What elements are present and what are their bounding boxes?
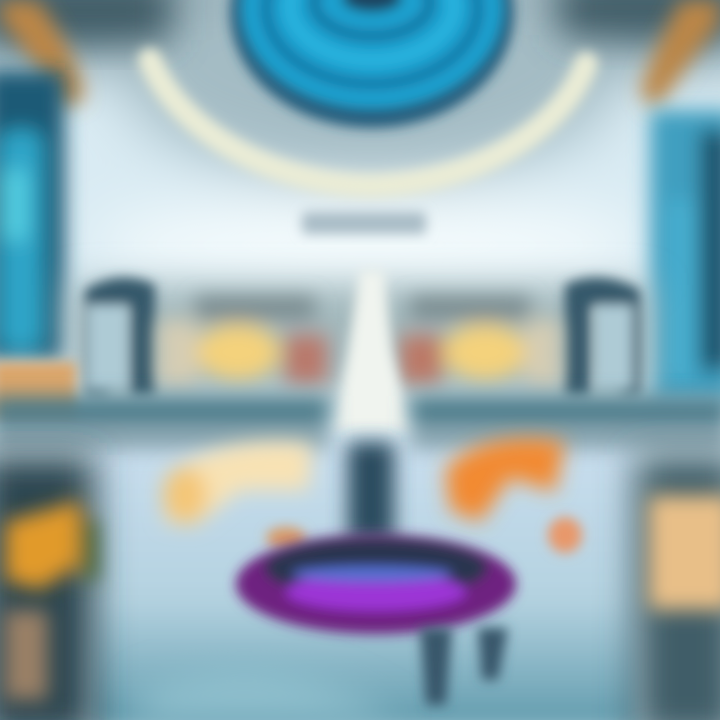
floor highlight xyxy=(140,666,400,720)
right shop: tan display xyxy=(648,495,720,610)
small orange blob xyxy=(548,517,582,553)
spiral: blue ceiling rings xyxy=(230,0,514,128)
cream map shape xyxy=(163,442,312,525)
ceiling: dome shading xyxy=(0,0,720,290)
gallery: middle storey xyxy=(70,270,650,432)
top left streak: orange xyxy=(0,0,84,108)
ceiling label: blurred sign xyxy=(302,212,426,234)
top right streak: orange xyxy=(640,0,720,110)
left shop: beige display xyxy=(4,610,48,700)
top corners: dark shadow xyxy=(0,0,720,40)
central spire: white xyxy=(334,270,410,432)
purple ring xyxy=(236,534,516,634)
small orange blob left xyxy=(266,527,306,549)
central pedestal: dark xyxy=(348,442,394,542)
left wall: dark lower section xyxy=(0,455,95,720)
orange map shape xyxy=(445,438,565,522)
left column: blue xyxy=(0,70,65,360)
left arch: dark xyxy=(85,278,155,395)
balcony: dark band xyxy=(0,396,720,448)
right column: blue xyxy=(650,110,720,400)
central legs: dark xyxy=(420,628,508,705)
right wall: dark lower section xyxy=(635,455,720,720)
left counter: orange xyxy=(0,362,76,418)
right shop: yellow panels xyxy=(400,297,560,385)
right arch: dark xyxy=(565,278,640,395)
cream arc xyxy=(150,60,586,186)
left shop: orange display xyxy=(5,500,98,590)
left shop: yellow panels xyxy=(158,297,327,385)
gallery backdrop xyxy=(70,285,650,395)
floor: lower level xyxy=(90,440,640,720)
